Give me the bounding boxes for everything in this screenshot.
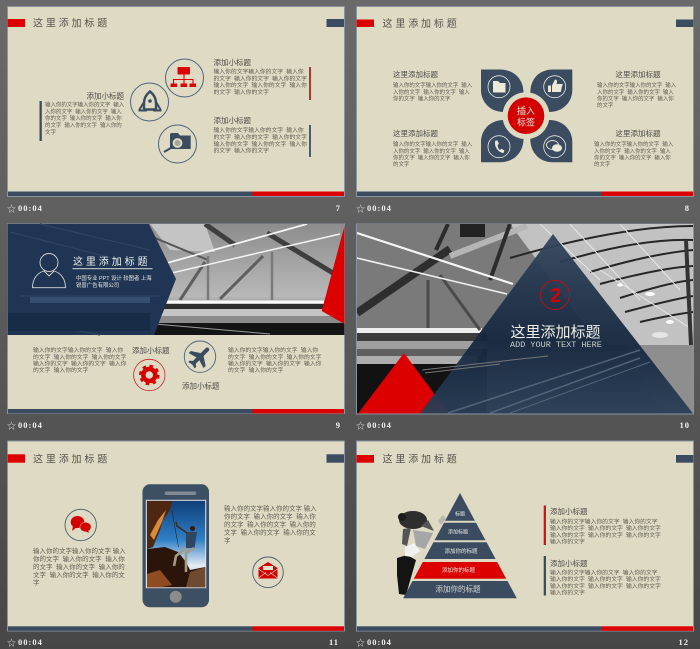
title: 这里添加标题 <box>382 452 460 466</box>
footer: slide 12: 00:04 <box>367 637 392 647</box>
footer: slide 12 <box>356 637 689 648</box>
footer: slide 9: 9 <box>336 420 341 430</box>
panel: slide 9 <box>8 224 345 414</box>
heading: left: 添加小标题 <box>86 90 124 100</box>
text block: left: 入你的文字 输入你的文字 输入 <box>45 107 122 115</box>
text block: bottom right: 的文字 输入你的文字 <box>214 146 269 154</box>
text block: right: 输入你的文字 输入你的文字 输入你 <box>228 360 322 368</box>
text block: upper right: 入你的文字 输入你的文字 输入 <box>597 88 674 96</box>
pyramid: 标题 <box>455 510 465 518</box>
number badge: 2 <box>550 285 561 307</box>
text block: lower: 输入你的文字 输入你的文字 输入你的文字 <box>550 575 661 583</box>
panel: slide 11 <box>8 441 344 631</box>
text block: left: 文字 <box>45 128 56 136</box>
text block: right: 的文字 输入你的文字 输入你的 <box>224 520 316 528</box>
text block: upper: 输入你的文字 输入你的文字 输入你的文字 <box>550 524 661 532</box>
text block: left: 的文字 输入你的文字 输入你的 <box>33 562 125 571</box>
pyramid: 添加你的标题 <box>442 566 475 574</box>
text block: right: 你的文字 输入你的文字 输入你 <box>224 512 316 520</box>
accent bar: navy <box>544 556 546 596</box>
accent bar: navy right <box>309 125 311 157</box>
text block: left: 你的文字 输入你的文字 输入你 <box>45 114 122 122</box>
footer: slide 10: ☆ <box>356 421 365 431</box>
text block: left: 的文字 输入你的文字 <box>33 366 89 374</box>
text block: lower right: 输入你的文字输入你的文字 输入 <box>594 140 674 148</box>
navy title tab <box>676 20 694 27</box>
phone <box>142 484 209 607</box>
heading: gear: 添加小标题 <box>132 345 170 355</box>
text block: top right: 的文字 输入你的文字 输入你的文字 <box>214 74 307 82</box>
footer: slide 8: 00:04 <box>367 203 392 213</box>
footer: slide 11: 11 <box>329 637 339 647</box>
text block: lower left: 入你的文字 输入你的文字 输入 <box>393 147 470 155</box>
pyramid <box>403 493 517 598</box>
footer: slide 10: 10 <box>680 420 690 430</box>
subtitle: 锐普广告有限公司 <box>76 281 119 289</box>
text block: upper right: 的文字 <box>597 101 614 109</box>
text block: left: 字 <box>33 578 40 586</box>
text block: left: 文字 输入你的文字 输入你的文 <box>33 570 125 579</box>
footer: slide 12: 12 <box>678 637 689 647</box>
footer: slide 7 <box>7 203 341 214</box>
panel: slide 10 <box>356 224 694 414</box>
woman peeking photo <box>397 511 446 595</box>
navy title tab <box>326 19 344 27</box>
icon: rocket <box>130 83 168 121</box>
footer: slide 7: 7 <box>336 203 341 213</box>
footer: slide 9: ☆ <box>7 421 16 431</box>
footer: slide 10: 00:04 <box>367 420 392 430</box>
text block: left: 你的文字 输入你的文字 输入你 <box>33 554 125 563</box>
red triangle <box>358 353 449 414</box>
progress bar <box>357 626 693 631</box>
title: 这里添加标题 <box>33 452 110 466</box>
footer: slide 7: 00:04 <box>18 203 43 213</box>
title: 这里添加标题 <box>382 17 460 30</box>
icon: envelope <box>253 557 283 588</box>
text block: upper left: 入你的文字 输入你的文字 输入 <box>393 88 470 96</box>
heading: top right: 添加小标题 <box>214 57 251 67</box>
heading: lower left: 这里添加标题 <box>393 128 438 138</box>
subtitle: 中国专业 PPT 设计 较图者 上海 <box>76 274 152 282</box>
red title tab <box>356 455 374 463</box>
progress bar <box>8 626 344 631</box>
climbing photo <box>147 501 205 587</box>
heading: lower: 添加小标题 <box>550 558 588 568</box>
heading: upper left: 这里添加标题 <box>393 69 438 79</box>
light streaks in triangle <box>422 350 650 413</box>
heading: bottom right: 添加小标题 <box>214 115 251 125</box>
icon: airplane <box>184 341 216 373</box>
navy triangle <box>420 234 693 414</box>
text block: top right: 输入你的文字输入你的文字 输入你 <box>214 68 304 76</box>
accent bar: red <box>544 506 546 545</box>
red title tab <box>356 20 374 27</box>
subtitle: ADD YOUR TEXT HERE <box>510 340 602 350</box>
text block: left: 输入你的文字输入你的文字 输入你 <box>33 346 123 354</box>
red title tab <box>8 19 25 27</box>
icon: camera with magnifier <box>158 125 196 163</box>
icon: org chart <box>166 59 204 97</box>
footer: slide 9 <box>7 420 341 431</box>
petal diagram <box>481 70 572 162</box>
icon: thumbs up <box>544 76 566 98</box>
text block: upper right: 输入你的文字输入你的文字 输入 <box>597 81 677 89</box>
text block: upper left: 你的文字 输入你的文字 <box>393 94 451 102</box>
bridge photo <box>149 224 344 335</box>
text block: upper right: 你的文字 输入你的文字 输入你 <box>597 94 674 102</box>
panel: slide 12 <box>356 441 694 631</box>
icon: chat bubbles <box>544 136 566 158</box>
icon: gear <box>134 359 165 391</box>
title underline <box>72 268 152 269</box>
text block: right: 输入你的文字输入你的文字 输入 <box>224 504 317 512</box>
text block: lower right: 你的文字 输入你的文字 输入你 <box>594 154 671 162</box>
text block: lower: 输入你的文字输入你的文字 输入你的文字 <box>550 568 658 576</box>
pyramid: 添加你的标题 <box>444 547 478 555</box>
footer: slide 9: 00:04 <box>18 420 43 430</box>
text block: right: 的文字 输入你的文字 输入你的文字 <box>228 353 322 361</box>
faint bridge in overlay <box>8 224 160 335</box>
text block: upper: 输入你的文字 输入你的文字 输入你的文字 <box>550 531 661 539</box>
text block: lower: 输入你的文字 <box>550 589 585 597</box>
icon: wechat <box>65 509 96 541</box>
heading: upper: 添加小标题 <box>550 506 588 516</box>
navy title tab <box>676 455 694 463</box>
accent bar: navy left <box>40 101 42 141</box>
red title tab <box>8 454 25 463</box>
text block: top right: 的文字 输入你的文字 <box>214 88 269 96</box>
text block: right: 的文字 输入你的文字 <box>228 366 284 374</box>
footer: slide 11: 00:04 <box>18 637 43 647</box>
footer: slide 8 <box>356 203 690 214</box>
text block: lower left: 你的文字 输入你的文字 输入你 <box>393 154 470 162</box>
bridge photo <box>357 224 693 414</box>
heading: airplane: 添加小标题 <box>182 380 220 390</box>
progress bar <box>8 409 344 414</box>
text block: upper: 输入你的文字输入你的文字 输入你的文字 <box>550 518 658 526</box>
progress bar <box>357 192 693 196</box>
text block: lower: 输入你的文字 输入你的文字 输入你的文字 <box>550 582 661 590</box>
pyramid: 添加你的标题 <box>436 584 481 594</box>
panel: slide 7 <box>8 6 344 196</box>
panel: slide 8 <box>356 6 694 196</box>
text block: left: 输入你的文字 输入你的文字 输入你 <box>33 360 127 368</box>
text block: right: 输入你的文字输入你的文字 输入你 <box>228 346 318 354</box>
center badge: 标签 <box>517 116 535 128</box>
icon: person outline <box>32 254 66 288</box>
text block: left: 输入你的文字输入你的文字 输入 <box>45 100 125 108</box>
pyramid: 添加标题 <box>448 528 468 536</box>
text block: top right: 输入你的文字 输入你的文字 输入你 <box>214 81 307 89</box>
text block: lower right: 入你的文字 输入你的文字 输入 <box>594 147 671 155</box>
text block: right: 文字 输入你的文字 输入你的文 <box>224 528 316 536</box>
accent bar: red <box>309 67 311 100</box>
text block: left: 的文字 输入你的文字 输入你的 <box>45 121 122 129</box>
footer: slide 11: ☆ <box>7 638 16 648</box>
text block: lower left: 输入你的文字输入你的文字 输入 <box>393 140 473 148</box>
center badge <box>508 97 544 134</box>
navy overlay <box>8 224 176 335</box>
footer: slide 8: ☆ <box>356 204 365 214</box>
text block: left: 的文字 输入你的文字 输入你的文字 <box>33 353 127 361</box>
title: 这里添加标题 <box>33 16 110 30</box>
icon: phone <box>488 136 510 158</box>
title: 这里添加标题 <box>73 255 150 268</box>
footer: slide 12: ☆ <box>356 638 365 648</box>
footer: slide 10 <box>356 420 690 431</box>
text block: lower right: 的文字 <box>594 160 611 168</box>
title: 这里添加标题 <box>510 324 601 341</box>
footer: slide 11 <box>7 637 339 648</box>
red wedge <box>322 226 344 324</box>
progress bar <box>8 192 344 196</box>
icon: folder <box>488 76 510 98</box>
text block: bottom right: 的文字 输入你的文字 输入你的文字 <box>214 133 307 141</box>
text block: right: 字 <box>224 536 231 544</box>
heading: upper right: 这里添加标题 <box>616 69 661 79</box>
text block: bottom right: 输入你的文字 输入你的文字 输入你 <box>214 140 307 148</box>
footer: slide 7: ☆ <box>7 204 16 214</box>
text block: upper: 输入你的文字 <box>550 538 585 546</box>
center badge: 插入 <box>517 105 535 116</box>
footer: slide 8: 8 <box>685 203 690 213</box>
text block: left: 输入你的文字输入你的文字 输入 <box>33 546 126 555</box>
navy title tab <box>326 454 344 463</box>
text block: lower left: 的文字 <box>393 160 410 168</box>
text block: bottom right: 输入你的文字输入你的文字 输入你 <box>214 126 304 134</box>
number badge <box>540 280 570 310</box>
heading: lower right: 这里添加标题 <box>616 128 661 138</box>
text block: upper left: 输入你的文字输入你的文字 输入 <box>393 81 473 89</box>
